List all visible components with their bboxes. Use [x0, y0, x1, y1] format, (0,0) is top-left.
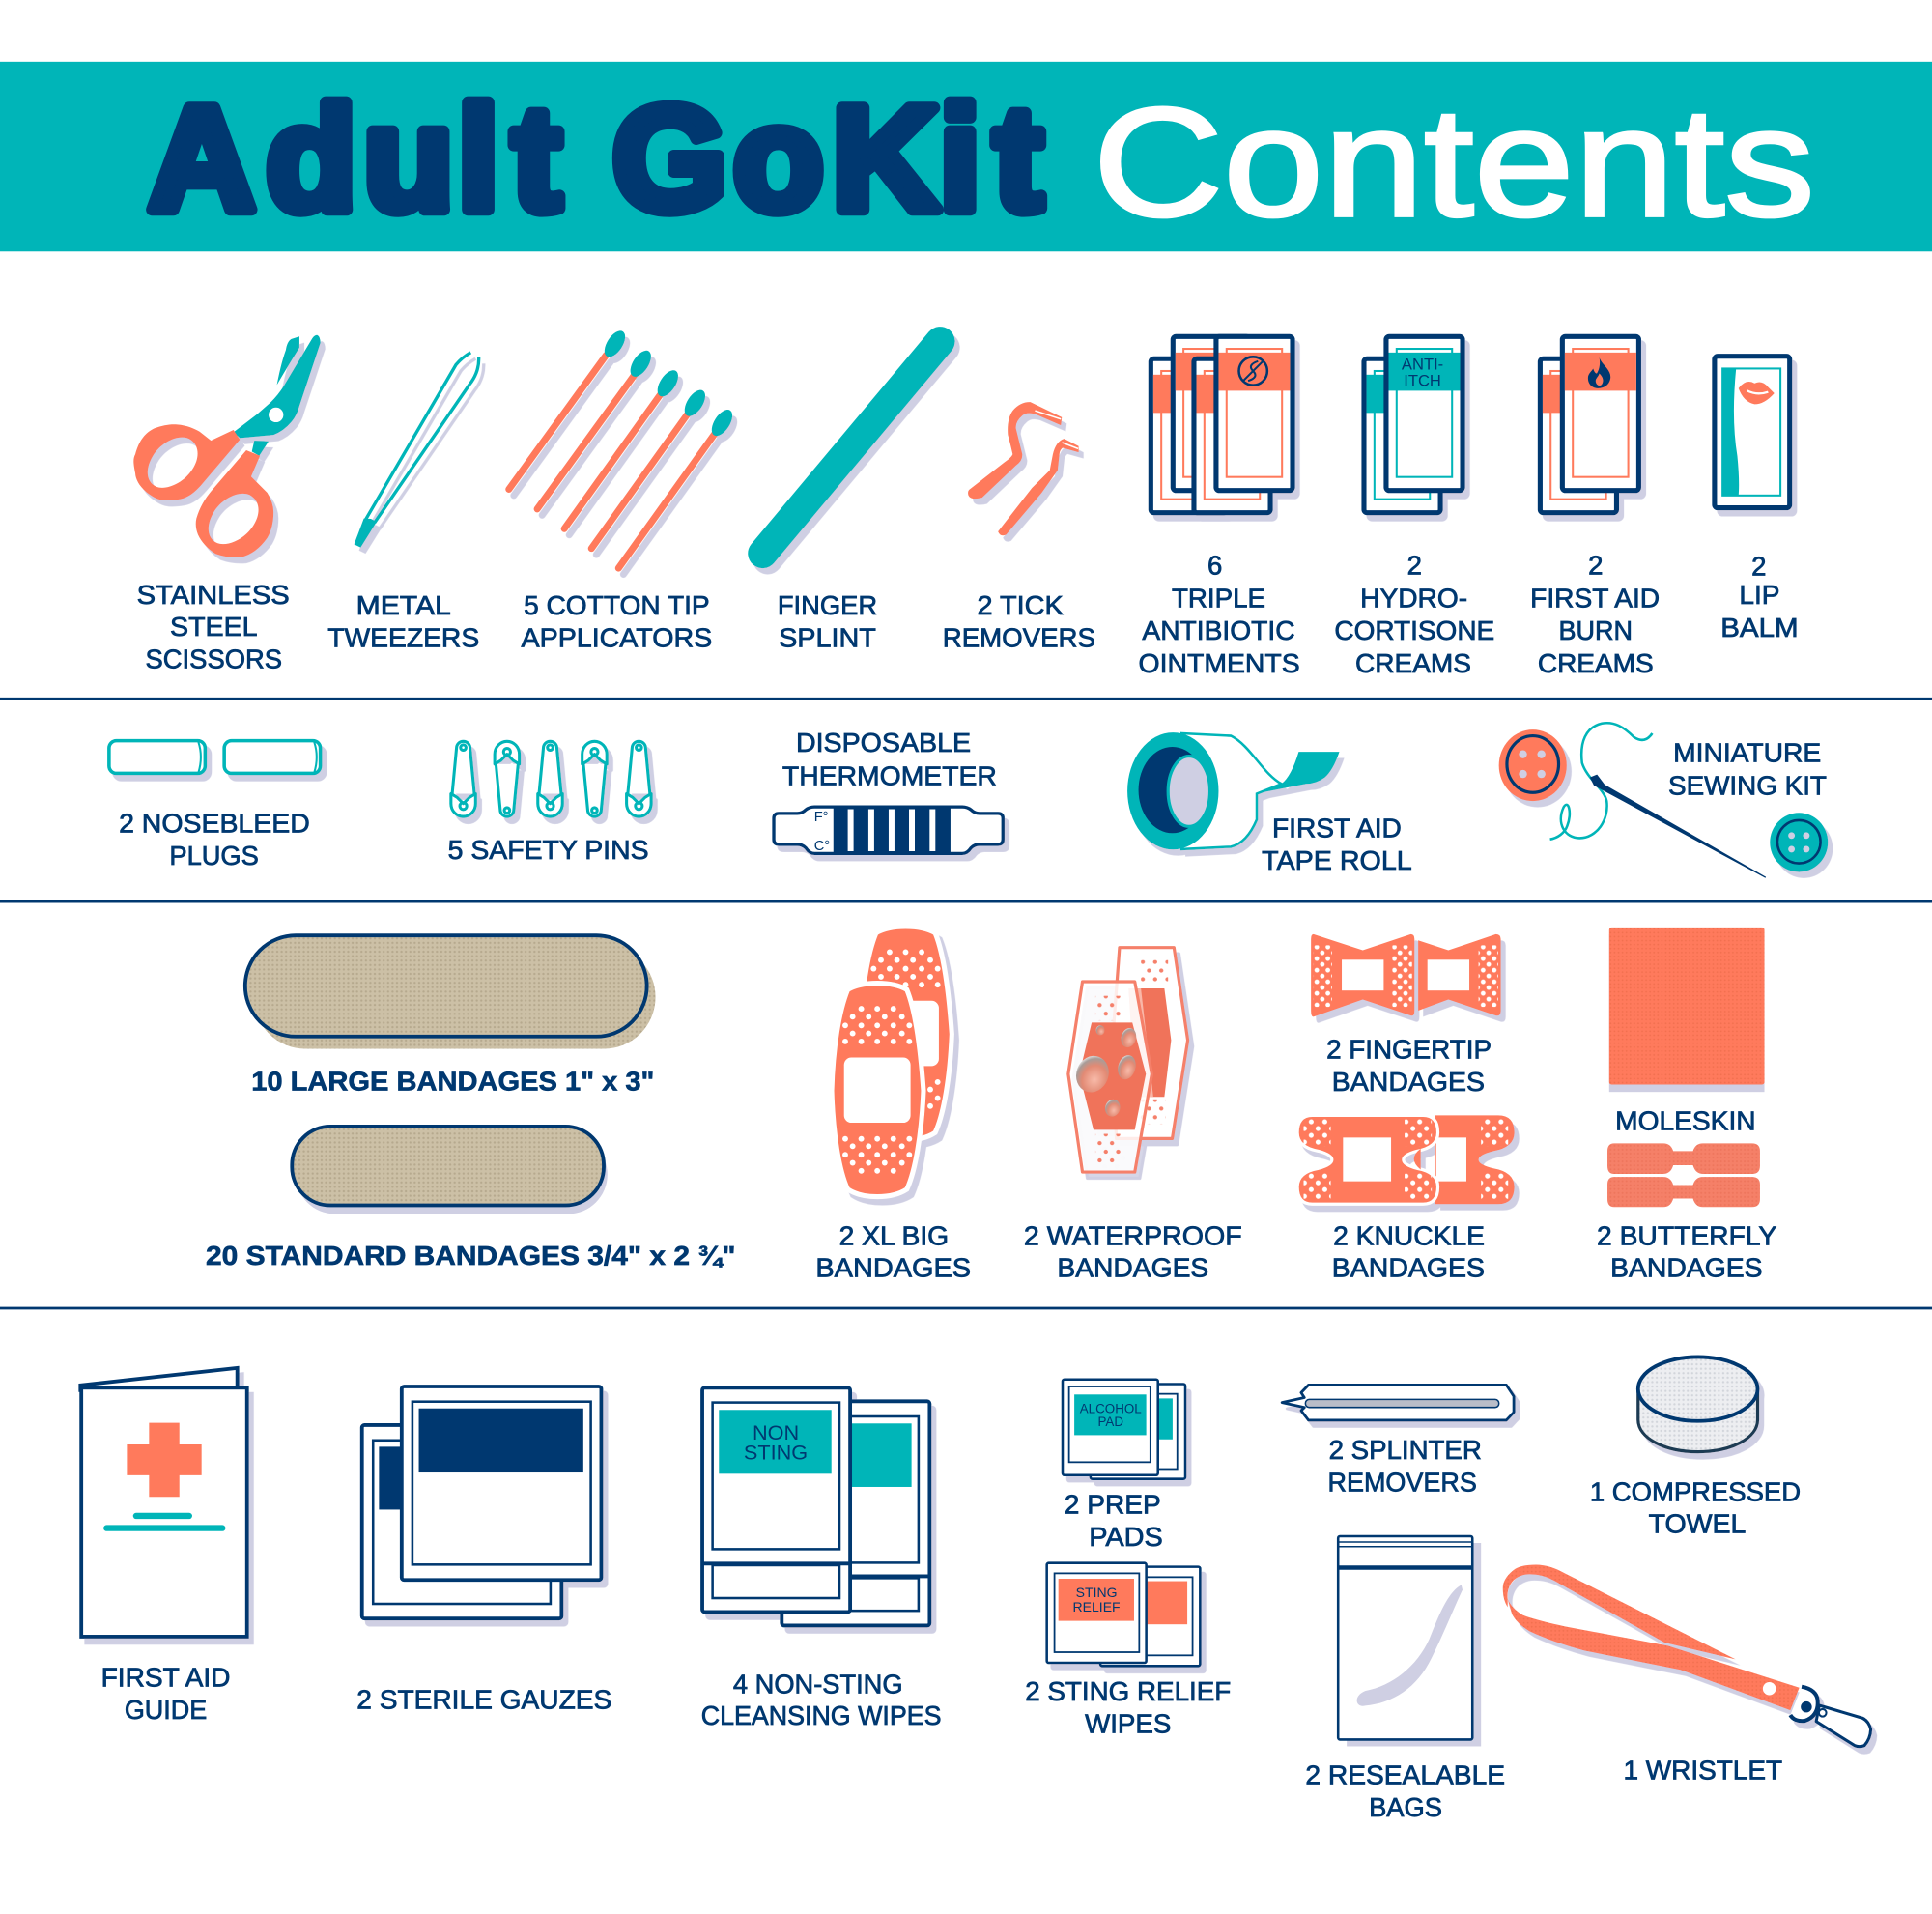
label: XL big bandages: 2 XL BIG [839, 1220, 949, 1250]
icon: standard bandage [292, 1127, 608, 1214]
icon: triple antibiotic ointment packets [1151, 336, 1293, 513]
icon: thermometer [774, 807, 1003, 854]
heading: Adult GoKit: Adult GoKit [149, 76, 1043, 242]
label: first aid burn creams: FIRST AID [1530, 584, 1660, 614]
label: cotton tip applicators [522, 590, 712, 653]
label: sting relief wipes: WIPES [1085, 1708, 1171, 1738]
label: sting relief wipes [1025, 1676, 1231, 1738]
label: wristlet: 1 WRISTLET [1623, 1756, 1782, 1785]
label: lip balm [1720, 552, 1799, 643]
icon: moleskin [1609, 928, 1765, 1092]
label: safety pins: 5 SAFETY PINS [448, 835, 649, 865]
icon: hydrocortisone cream packets [1364, 336, 1463, 513]
label: waterproof bandages [1024, 1220, 1242, 1282]
icon: waterproof bandages [1068, 948, 1188, 1172]
label: triple antibiotic ointments: 6 [1208, 550, 1222, 580]
label: triple antibiotic ointments: ANTIBIOTIC [1142, 615, 1295, 645]
label: miniature sewing kit [1668, 738, 1827, 801]
icon: prep pads: ALCOHOL [1080, 1402, 1142, 1416]
label: miniature sewing kit: MINIATURE [1673, 738, 1821, 768]
icon: fingertip bandages [1311, 934, 1501, 1016]
label: first aid guide: FIRST AID [101, 1663, 231, 1693]
icon: cotton tip applicators [509, 328, 736, 568]
label: waterproof bandages: BANDAGES [1057, 1252, 1208, 1282]
label: sterile gauzes: 2 STERILE GAUZES [356, 1684, 611, 1714]
icon: thread [1550, 723, 1652, 840]
icon: non-sting wipes [702, 1387, 929, 1625]
label: splinter removers: REMOVERS [1327, 1467, 1477, 1497]
label: moleskin: MOLESKIN [1615, 1105, 1756, 1135]
label: hydrocortisone creams: 2 [1407, 550, 1422, 580]
label: non-sting cleansing wipes: CLEANSING WIPES [701, 1700, 941, 1730]
icon: non-sting wipes: NON [753, 1420, 799, 1444]
label: cotton tip applicators: 5 COTTON TIP [524, 590, 710, 620]
label: fingertip bandages: BANDAGES [1332, 1067, 1485, 1097]
label: compressed towel: 1 COMPRESSED [1590, 1476, 1801, 1506]
label: lip balm: BALM [1720, 613, 1799, 643]
title banner [0, 62, 1932, 251]
label: prep pads [1065, 1490, 1163, 1552]
label: XL big bandages: BANDAGES [815, 1252, 971, 1282]
label: compressed towel [1590, 1476, 1801, 1539]
label: miniature sewing kit: SEWING KIT [1668, 771, 1827, 801]
icon: needle [1591, 775, 1766, 877]
label: fingertip bandages [1326, 1035, 1492, 1097]
icon: burn cream packets [1540, 336, 1638, 513]
icon: large bandage [245, 935, 656, 1049]
label: knuckle bandages: 2 KNUCKLE [1333, 1220, 1485, 1250]
label: triple antibiotic ointments: TRIPLE [1172, 584, 1265, 614]
label: butterfly bandages [1597, 1220, 1777, 1282]
label: resealable bags: BAGS [1369, 1792, 1442, 1822]
label: finger splint: FINGER [778, 590, 877, 620]
label: first aid burn creams: 2 [1588, 550, 1603, 580]
icon: splinter remover [1282, 1385, 1514, 1420]
icon: teal button [1770, 813, 1828, 871]
label: metal tweezers: TWEEZERS [327, 623, 479, 653]
label: stainless steel scissors: STAINLESS [137, 580, 290, 610]
label: splinter removers: 2 SPLINTER [1329, 1435, 1482, 1465]
label: nosebleed plugs: PLUGS [169, 841, 259, 871]
label: first aid tape roll [1262, 814, 1412, 875]
icon: sting relief wipes: STING [1076, 1585, 1117, 1600]
icon: prep pads [1063, 1380, 1185, 1479]
icon: wristlet [1503, 1564, 1871, 1747]
label: metal tweezers [327, 590, 479, 653]
label: disposable thermometer [782, 728, 997, 790]
icon: knuckle bandages [1297, 1115, 1515, 1204]
icon: safety pins [451, 741, 651, 816]
label: lip balm: LIP [1739, 580, 1779, 610]
icon: sting relief wipes: RELIEF [1073, 1599, 1121, 1614]
icon: thermometer: F° [814, 810, 829, 825]
icon: sting relief wipes [1047, 1563, 1200, 1666]
label: knuckle bandages: BANDAGES [1332, 1252, 1485, 1282]
icon: tick removers [968, 402, 1079, 535]
label: first aid burn creams: CREAMS [1538, 648, 1654, 678]
panel: row 4 guide, wipes and accessories [80, 1357, 1871, 1822]
label: stainless steel scissors: STEEL [170, 612, 258, 642]
label: butterfly bandages: BANDAGES [1610, 1252, 1763, 1282]
label: non-sting cleansing wipes [701, 1670, 941, 1730]
icon: prep pads: PAD [1097, 1414, 1123, 1429]
label: fingertip bandages: 2 FINGERTIP [1326, 1035, 1492, 1065]
label: cotton tip applicators: APPLICATORS [522, 623, 712, 653]
label: waterproof bandages: 2 WATERPROOF [1024, 1220, 1242, 1250]
label: nosebleed plugs [119, 808, 310, 871]
icon: hydrocortisone cream packets: ANTI- [1402, 356, 1443, 374]
label: hydrocortisone creams: CREAMS [1355, 648, 1471, 678]
icon: sterile gauzes [362, 1386, 601, 1618]
label: tick removers: 2 TICK [977, 590, 1064, 620]
icon: sewing kit [1499, 723, 1828, 877]
icon: tweezers [355, 353, 479, 548]
icon: non-sting wipes: STING [744, 1441, 808, 1465]
icon: nosebleed plugs [109, 741, 321, 773]
heading: Contents: Contents [1093, 76, 1815, 249]
icon: hydrocortisone cream packets: ITCH [1404, 371, 1441, 389]
label: compressed towel: TOWEL [1649, 1509, 1746, 1539]
panel: row 2 small items [109, 723, 1828, 877]
label: metal tweezers: METAL [356, 590, 451, 620]
label: first aid guide: GUIDE [125, 1695, 207, 1725]
icon: compressed towel [1638, 1357, 1758, 1452]
label: disposable thermometer: THERMOMETER [782, 760, 997, 790]
label: finger splint: SPLINT [779, 623, 876, 653]
label: butterfly bandages: 2 BUTTERFLY [1597, 1220, 1777, 1250]
icon: butterfly bandages [1607, 1143, 1760, 1207]
label: splinter removers [1327, 1435, 1482, 1497]
label: disposable thermometer: DISPOSABLE [796, 728, 971, 757]
label: standard bandages: 20 STANDARD BANDAGES 3/4" x 2 ¾" [206, 1241, 735, 1271]
label: hydrocortisone creams: HYDRO- [1360, 584, 1467, 614]
icon: XL bandages [832, 927, 952, 1197]
icon: scissors [133, 335, 321, 557]
label: sting relief wipes: 2 STING RELIEF [1025, 1676, 1231, 1706]
label: first aid burn creams [1530, 550, 1660, 678]
label: large bandages: 10 LARGE BANDAGES 1" x 3" [251, 1066, 654, 1096]
label: first aid burn creams: BURN [1559, 615, 1633, 645]
icon: first aid guide [80, 1368, 247, 1637]
label: XL big bandages [815, 1220, 971, 1282]
label: first aid guide [101, 1663, 231, 1725]
label: stainless steel scissors: SCISSORS [146, 643, 282, 673]
label: first aid tape roll: TAPE ROLL [1262, 845, 1412, 875]
icon: thermometer: C° [814, 839, 830, 854]
label: triple antibiotic ointments [1139, 550, 1300, 678]
icon: lip balm [1715, 357, 1790, 508]
label: non-sting cleansing wipes: 4 NON-STING [733, 1670, 903, 1700]
label: resealable bags: 2 RESEALABLE [1305, 1760, 1505, 1790]
label: triple antibiotic ointments: OINTMENTS [1139, 648, 1300, 678]
label: lip balm: 2 [1751, 552, 1766, 582]
label: tick removers [943, 590, 1095, 653]
label: nosebleed plugs: 2 NOSEBLEED [119, 808, 310, 838]
label: first aid tape roll: FIRST AID [1272, 814, 1402, 843]
label: hydrocortisone creams: CORTISONE [1334, 615, 1494, 645]
label: hydrocortisone creams [1334, 550, 1494, 678]
label: prep pads: 2 PREP [1065, 1490, 1161, 1520]
panel: row 1 tools and creams [133, 328, 1799, 678]
label: knuckle bandages [1332, 1220, 1485, 1282]
icon: coral button [1499, 729, 1567, 801]
label: stainless steel scissors [137, 580, 290, 673]
label: finger splint [778, 590, 877, 653]
icon: resealable bag [1338, 1536, 1481, 1746]
panel: row 3 bandages [206, 927, 1777, 1282]
label: prep pads: PADS [1089, 1522, 1163, 1552]
icon: finger splint [763, 341, 940, 554]
icon: tape roll [1127, 732, 1339, 849]
label: resealable bags [1305, 1760, 1505, 1822]
label: tick removers: REMOVERS [943, 623, 1095, 653]
